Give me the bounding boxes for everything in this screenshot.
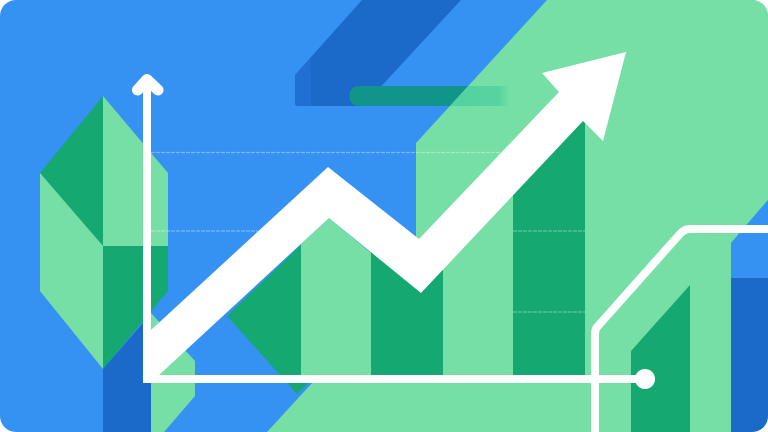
shape: small light green block [151, 313, 195, 432]
bar 5: dark green [513, 118, 585, 375]
panel: large light green area [267, 0, 768, 432]
axis: chart axes [138, 80, 655, 389]
grid lines [151, 152, 585, 312]
bar 1: dark green [227, 245, 308, 394]
shape: dark blue column [103, 323, 151, 432]
arrow: rising trend [151, 52, 626, 375]
bar 3: dark green [371, 250, 443, 375]
icon: y axis arrowhead [138, 80, 158, 90]
bar: faded highlight over green [450, 86, 510, 106]
axis: connector line with rounded bend [595, 229, 768, 432]
bar 2: light green [301, 218, 371, 375]
shape: bottom right dark green block [631, 285, 690, 432]
icon: x axis end dot [635, 369, 655, 389]
icon: left faceted hexagon [40, 96, 168, 369]
bar: teal highlight [349, 86, 480, 106]
shape: dark blue top banner [295, 0, 461, 106]
panel: bottom right blue block [731, 200, 768, 432]
bar chart [227, 118, 585, 394]
